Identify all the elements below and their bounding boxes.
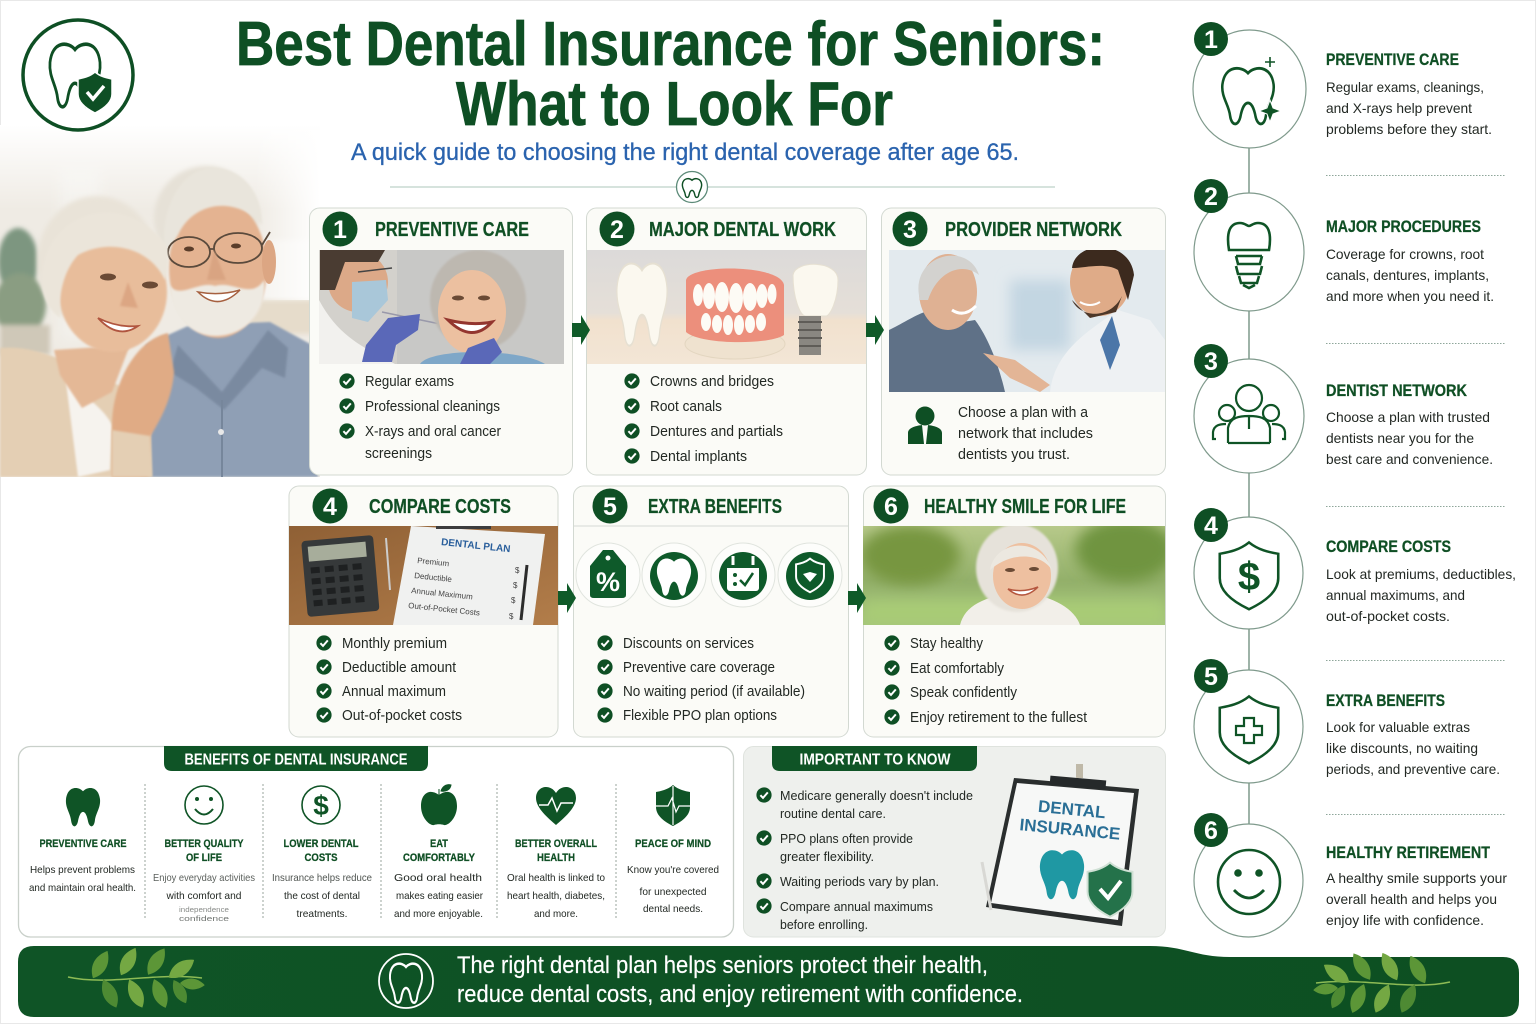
card 3: provider network: 3 bbox=[903, 216, 917, 244]
checklist bbox=[597, 635, 805, 724]
benefit: better quality of life bbox=[153, 786, 255, 923]
icon: discount tag bbox=[576, 543, 640, 607]
step 2: major procedures bbox=[1194, 179, 1494, 311]
description bbox=[958, 405, 1093, 463]
card 6: healthy smile for life bbox=[860, 486, 1175, 737]
card 5: extra benefits: EXTRA BENEFITS bbox=[648, 496, 782, 518]
benefit: eat comfortably: EAT bbox=[430, 838, 448, 850]
card 2: major dental work: 2 bbox=[610, 216, 624, 244]
card 6: healthy smile for life: HEALTHY SMILE FOR LIFE bbox=[924, 496, 1126, 518]
benefit: lower dental costs: Insurance helps reduce bbox=[272, 872, 372, 884]
arrow 5 to 6 bbox=[848, 583, 866, 613]
checklist bbox=[756, 787, 973, 932]
photo: calculator and dental plan: Deductible bbox=[414, 571, 453, 584]
checklist: Professional cleanings bbox=[365, 399, 500, 415]
checklist: Stay healthy bbox=[910, 636, 984, 652]
checklist: screenings bbox=[365, 446, 432, 462]
checklist: routine dental care. bbox=[780, 806, 886, 821]
benefit: preventive care: PREVENTIVE CARE bbox=[40, 838, 126, 850]
checklist: Deductible amount bbox=[342, 660, 456, 676]
woman body bbox=[0, 348, 152, 477]
checklist: No waiting period (if available) bbox=[623, 684, 805, 700]
photo: calculator and dental plan: $ bbox=[515, 566, 520, 575]
checklist: Root canals bbox=[650, 399, 722, 415]
checklist bbox=[624, 373, 783, 465]
checklist: Annual maximum bbox=[342, 684, 446, 700]
checklist bbox=[316, 635, 462, 724]
title: Best Dental Insurance for Seniors: bbox=[236, 10, 1105, 79]
benefit: lower dental costs: LOWER DENTAL bbox=[284, 838, 359, 850]
benefit: peace of mind: dental needs. bbox=[643, 903, 703, 915]
step 6: healthy retirement: A healthy smile supports your bbox=[1326, 870, 1507, 886]
description: Choose a plan with a bbox=[958, 405, 1089, 421]
banner text: The right dental plan helps seniors protect their health, bbox=[457, 952, 988, 979]
icon: tooth badge bbox=[379, 954, 433, 1008]
photo: calculator and dental plan: Annual Maximum bbox=[411, 586, 474, 601]
icon: calendar bbox=[711, 543, 775, 607]
checklist: Preventive care coverage bbox=[623, 660, 775, 676]
card 5: extra benefits: 5 bbox=[603, 493, 617, 521]
benefit: preventive care: Helps prevent problems bbox=[30, 864, 135, 876]
panel: benefits of dental insurance bbox=[18, 746, 734, 937]
photo: calculator and dental plan: DENTAL PLAN bbox=[441, 537, 511, 555]
card 2: major dental work bbox=[586, 208, 866, 475]
card 5: extra benefits bbox=[574, 486, 848, 737]
icon: shield with dollar bbox=[1220, 542, 1278, 609]
card 6: healthy smile for life: 6 bbox=[884, 493, 898, 521]
woman hand bbox=[112, 333, 174, 477]
step 4: compare costs: Look at premiums, deductibles, bbox=[1326, 566, 1516, 582]
step 6: healthy retirement: HEALTHY RETIREMENT bbox=[1326, 844, 1490, 862]
dotted dividers bbox=[1326, 176, 1505, 814]
arrow 1 to 2 bbox=[572, 315, 590, 345]
photo: calculator and dental plan: Out-of-Pocket Costs bbox=[408, 601, 480, 618]
step 2: major procedures: Coverage for crowns, root bbox=[1326, 246, 1484, 262]
banner text bbox=[457, 952, 1023, 1008]
subtitle: A quick guide to choosing the right dental coverage after age 65. bbox=[351, 139, 1019, 166]
icon: shield with plus bbox=[1220, 696, 1278, 763]
step 4: compare costs: 4 bbox=[1204, 512, 1218, 540]
benefit: better quality of life: with comfort and bbox=[166, 890, 242, 902]
step 2: major procedures: MAJOR PROCEDURES bbox=[1326, 218, 1481, 236]
step 3: dentist network: 3 bbox=[1204, 348, 1218, 376]
panel: important to know bbox=[744, 746, 1166, 937]
checklist bbox=[884, 635, 1087, 726]
man body bbox=[140, 322, 318, 477]
checklist: Compare annual maximums bbox=[780, 899, 933, 914]
card 1: preventive care: PREVENTIVE CARE bbox=[375, 219, 529, 241]
step 1: preventive care: 1 bbox=[1204, 26, 1218, 54]
step 3: dentist network: best care and convenience. bbox=[1326, 451, 1493, 467]
icon: sparkling tooth bbox=[1222, 57, 1281, 124]
checklist: Discounts on services bbox=[623, 636, 754, 652]
decoration: left leaves bbox=[68, 945, 205, 1010]
card 4: compare costs bbox=[289, 486, 558, 737]
benefit: better overall health: Oral health is linked to bbox=[507, 872, 605, 884]
photo: dentist examining patient bbox=[319, 250, 564, 364]
icon: smile bbox=[1218, 850, 1280, 914]
step 5: extra benefits: like discounts, no waiting bbox=[1326, 740, 1478, 756]
benefit: better quality of life: confidence bbox=[179, 916, 229, 923]
step 5: extra benefits: periods, and preventive care. bbox=[1326, 761, 1500, 777]
checklist: Dental implants bbox=[650, 449, 747, 465]
benefit: better overall health: and more. bbox=[534, 908, 578, 920]
benefit: lower dental costs: the cost of dental bbox=[284, 890, 360, 902]
step 5: extra benefits: 5 bbox=[1204, 663, 1218, 691]
illustration: clipboard bbox=[982, 764, 1139, 926]
tab heading: BENEFITS OF DENTAL INSURANCE bbox=[184, 752, 408, 768]
step 3: dentist network: Choose a plan with trusted bbox=[1326, 409, 1490, 425]
step 2: major procedures: 2 bbox=[1204, 183, 1218, 211]
benefit: eat comfortably: Good oral health bbox=[394, 872, 482, 884]
card 1: preventive care bbox=[310, 208, 572, 475]
benefit: better overall health: BETTER OVERALL bbox=[515, 838, 597, 850]
icon: shield bbox=[778, 543, 842, 607]
step 4: compare costs: out-of-pocket costs. bbox=[1326, 608, 1450, 624]
description: network that includes bbox=[958, 426, 1093, 442]
benefit: peace of mind bbox=[627, 785, 719, 915]
card 2: major dental work: MAJOR DENTAL WORK bbox=[649, 219, 836, 241]
photo: smiling woman in park bbox=[863, 526, 1165, 625]
step 1: preventive care: and X-rays help prevent bbox=[1326, 100, 1472, 116]
step 5: extra benefits bbox=[1194, 659, 1500, 783]
benefit: eat comfortably: COMFORTABLY bbox=[403, 852, 476, 864]
checklist: Flexible PPO plan options bbox=[623, 708, 777, 724]
icon: dentist group bbox=[1213, 385, 1285, 443]
woman head bbox=[34, 196, 142, 314]
step 1: preventive care: Regular exams, cleanings, bbox=[1326, 79, 1484, 95]
icon: shield with dollar: $ bbox=[1238, 555, 1260, 599]
checklist: Eat comfortably bbox=[910, 661, 1005, 677]
benefit: lower dental costs bbox=[272, 786, 372, 920]
checklist: Out-of-pocket costs bbox=[342, 708, 462, 724]
illustration: clipboard: INSURANCE bbox=[1019, 815, 1121, 844]
icon: dental implant bbox=[1228, 223, 1270, 288]
benefit: preventive care bbox=[29, 788, 136, 894]
timeline connector bbox=[1248, 148, 1250, 824]
benefit: better quality of life: Enjoy everyday activities bbox=[153, 872, 255, 884]
benefit: better overall health: heart health, diabetes, bbox=[507, 890, 605, 902]
title bbox=[236, 10, 1105, 139]
benefit: lower dental costs: COSTS bbox=[304, 852, 338, 864]
illustration: clipboard: DENTAL bbox=[1037, 797, 1106, 822]
banner text: reduce dental costs, and enjoy retirement with confidence. bbox=[457, 981, 1023, 1008]
step 5: extra benefits: EXTRA BENEFITS bbox=[1326, 692, 1445, 710]
step 3: dentist network: dentists near you for the bbox=[1326, 430, 1474, 446]
icon: tooth bbox=[642, 543, 706, 607]
step 6: healthy retirement: overall health and helps you bbox=[1326, 891, 1497, 907]
benefit: better quality of life: independence bbox=[179, 907, 229, 914]
benefit: eat comfortably: and more enjoyable. bbox=[394, 908, 483, 920]
step 4: compare costs bbox=[1194, 508, 1516, 629]
photo: calculator and dental plan: $ bbox=[513, 581, 518, 590]
decoration: right leaves bbox=[1313, 950, 1450, 1015]
photo: calculator and dental plan: Premium bbox=[417, 556, 450, 568]
banner bbox=[18, 945, 1519, 1017]
checklist: PPO plans often provide bbox=[780, 831, 913, 846]
icon: discount tag: % bbox=[596, 567, 620, 597]
photo: patient and dentist bbox=[889, 247, 1165, 392]
step 6: healthy retirement bbox=[1194, 813, 1507, 937]
photo: senior couple bbox=[0, 125, 320, 477]
benefit: better quality of life: OF LIFE bbox=[186, 852, 222, 864]
checklist: Enjoy retirement to the fullest bbox=[910, 710, 1087, 726]
checklist: before enrolling. bbox=[780, 917, 868, 932]
card 1: preventive care: 1 bbox=[333, 216, 347, 244]
step 1: preventive care: PREVENTIVE CARE bbox=[1326, 51, 1459, 69]
divider with tooth icon bbox=[390, 172, 1055, 202]
arrow 2 to 3 bbox=[866, 315, 884, 345]
benefit: lower dental costs: treatments. bbox=[296, 908, 348, 920]
benefit: better overall health: HEALTH bbox=[537, 852, 575, 864]
step 2: major procedures: and more when you need it. bbox=[1326, 288, 1494, 304]
step 5: extra benefits: Look for valuable extras bbox=[1326, 719, 1470, 735]
checklist: Crowns and bridges bbox=[650, 374, 774, 390]
checklist: Waiting periods vary by plan. bbox=[780, 874, 939, 889]
icon: person bbox=[908, 406, 942, 444]
benefit: preventive care: and maintain oral health. bbox=[29, 882, 136, 894]
checklist bbox=[339, 373, 501, 462]
step 3: dentist network bbox=[1194, 344, 1493, 473]
checklist: Regular exams bbox=[365, 374, 454, 390]
benefit: better overall health bbox=[507, 787, 605, 920]
photo: calculator and dental plan: $ bbox=[511, 596, 516, 605]
benefit: peace of mind: PEACE OF MIND bbox=[635, 838, 711, 850]
description: dentists you trust. bbox=[958, 447, 1070, 463]
logo: tooth and shield bbox=[23, 20, 133, 130]
card 4: compare costs: COMPARE COSTS bbox=[369, 496, 511, 518]
title: What to Look For bbox=[456, 70, 893, 139]
checklist: X-rays and oral cancer bbox=[365, 424, 501, 440]
photo: calculator and dental plan bbox=[289, 522, 558, 625]
step 4: compare costs: annual maximums, and bbox=[1326, 587, 1465, 603]
step 1: preventive care bbox=[1193, 22, 1492, 148]
benefit: lower dental costs: $ bbox=[313, 790, 329, 821]
checklist: Monthly premium bbox=[342, 636, 447, 652]
tab heading: IMPORTANT TO KNOW bbox=[800, 752, 951, 768]
photo: calculator and dental plan: $ bbox=[509, 612, 514, 621]
tab heading bbox=[772, 746, 977, 771]
benefit: eat comfortably: makes eating easier bbox=[396, 890, 483, 902]
step 4: compare costs: COMPARE COSTS bbox=[1326, 538, 1451, 556]
checklist: greater flexibility. bbox=[780, 849, 874, 864]
card 3: provider network: PROVIDER NETWORK bbox=[945, 219, 1122, 241]
benefit: peace of mind: Know you're covered bbox=[627, 864, 719, 876]
benefit: peace of mind: for unexpected bbox=[640, 886, 707, 898]
benefit: better quality of life: BETTER QUALITY bbox=[164, 838, 244, 850]
step 2: major procedures: canals, dentures, implants, bbox=[1326, 267, 1489, 283]
step 1: preventive care: problems before they start. bbox=[1326, 121, 1492, 137]
checklist: Medicare generally doesn't include bbox=[780, 788, 973, 803]
man head bbox=[155, 165, 257, 251]
photo: tooth, dentures and implant bbox=[587, 250, 866, 364]
checklist: Speak confidently bbox=[910, 685, 1018, 701]
arrow 4 to 5 bbox=[558, 583, 576, 613]
tab heading bbox=[164, 746, 428, 771]
card 3: provider network bbox=[882, 208, 1166, 475]
benefit: eat comfortably bbox=[394, 785, 483, 920]
step 6: healthy retirement: enjoy life with confidence. bbox=[1326, 912, 1484, 928]
step 6: healthy retirement: 6 bbox=[1204, 817, 1218, 845]
card 4: compare costs: 4 bbox=[323, 493, 337, 521]
checklist: Dentures and partials bbox=[650, 424, 783, 440]
step 3: dentist network: DENTIST NETWORK bbox=[1326, 382, 1467, 400]
